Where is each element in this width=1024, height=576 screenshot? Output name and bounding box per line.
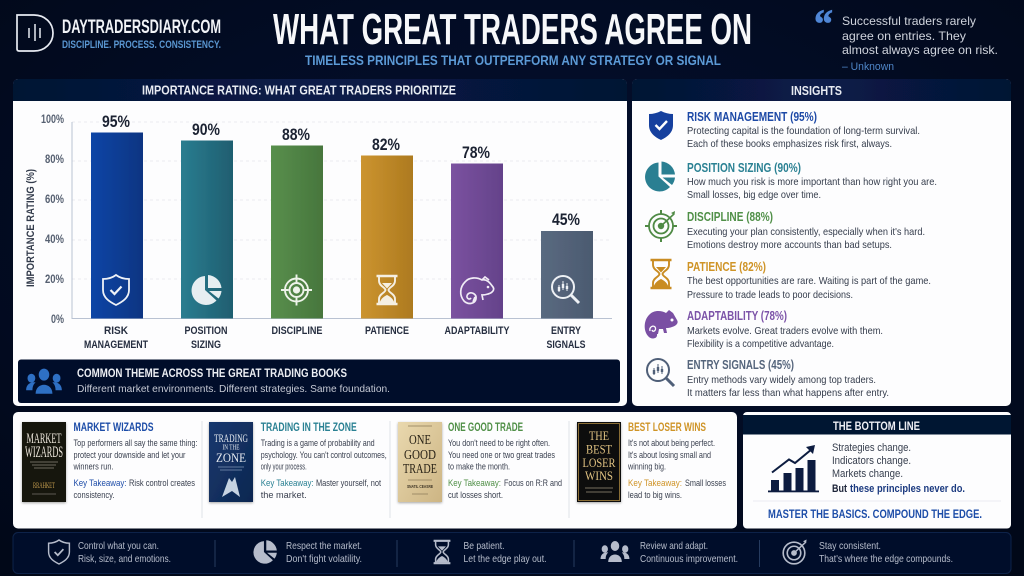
principle: control: Risk, size, and emotions. — [78, 553, 171, 565]
insight: entry signals: ENTRY SIGNALS (45%) — [687, 358, 794, 372]
bottom line text: Indicators change. — [832, 455, 911, 467]
bar: discipline: 88% — [282, 126, 310, 144]
book: best loser wins: BEST LOSER WINS — [628, 422, 706, 434]
principle: patience — [434, 540, 546, 565]
quote text: almost always agree on risk. — [842, 43, 998, 57]
y axis title: IMPORTANCE RATING (%) — [25, 169, 37, 287]
book: best loser wins: It's not about being perfect. — [628, 438, 715, 449]
principle: patience: Be patient. — [464, 540, 504, 552]
book cover: best loser wins: BEST — [586, 442, 612, 456]
y axis labels: 60% — [45, 194, 64, 206]
insight: adaptability — [645, 309, 883, 350]
bottom line text: these principles never do. — [850, 483, 965, 495]
book: trading in the zone — [209, 422, 387, 502]
bar: discipline — [271, 126, 323, 337]
insight: position sizing: Small losses, big edge over time. — [687, 189, 821, 201]
bar: entry signals: ENTRY — [551, 325, 582, 337]
bar: entry signals: SIGNALS — [546, 339, 586, 351]
book cover: best loser wins — [577, 422, 621, 502]
principle: consistency: Stay consistent. — [819, 540, 881, 552]
quote — [814, 1, 998, 73]
bar: entry signals: 45% — [552, 211, 580, 229]
title: WHAT GREAT TRADERS AGREE ON — [273, 5, 752, 54]
insight: discipline: Emotions destroy more accounts than bad setups. — [687, 239, 892, 251]
book cover: market wizards — [22, 422, 66, 502]
book cover: one good trade: TRADE — [403, 461, 437, 476]
bar: patience: 82% — [372, 136, 400, 154]
bar: risk management — [84, 113, 148, 351]
header logo — [17, 15, 221, 51]
book: market wizards: consistency. — [74, 490, 114, 501]
insight: discipline: DISCIPLINE (88%) — [687, 210, 773, 224]
book: best loser wins: It's about losing small and — [628, 450, 711, 461]
book: best loser wins: Key Takeaway: — [628, 478, 682, 489]
y axis labels: 40% — [45, 234, 64, 246]
panel: the bottom line — [743, 412, 1011, 528]
insight: entry signals: It matters far less than what happens after entry. — [687, 387, 889, 399]
common theme heading: COMMON THEME ACROSS THE GREAT TRADING BOOKS — [77, 368, 347, 380]
book: market wizards: Risk control creates — [129, 478, 195, 489]
principle: consistency: That's where the edge compounds. — [819, 553, 953, 565]
bar: position sizing: POSITION — [184, 325, 228, 337]
principle: control: Control what you can. — [78, 540, 159, 552]
book: trading in the zone: only your process. — [261, 462, 307, 472]
book cover: trading in the zone: TRADING — [214, 431, 248, 445]
book: trading in the zone: TRADING IN THE ZONE — [261, 422, 357, 434]
book: trading in the zone: Trading is a game of probability and — [261, 438, 375, 449]
bar: position sizing: 90% — [192, 121, 220, 139]
book cover: market wizards: RRAHKET — [33, 481, 55, 490]
principle: respect: Don't fight volatility. — [286, 553, 362, 565]
y axis labels: 80% — [45, 154, 64, 166]
book: best loser wins: Small losses — [685, 478, 726, 489]
insight: entry signals — [647, 358, 889, 399]
principle: review — [601, 540, 738, 565]
bar: discipline: DISCIPLINE — [272, 325, 322, 337]
principle: control — [49, 540, 171, 565]
principle: respect — [253, 540, 362, 565]
quote attribution: – Unknown — [842, 61, 894, 73]
book cover: best loser wins: LOSER — [582, 455, 616, 470]
book cover: trading in the zone: IN THE — [222, 442, 240, 452]
principle: patience: Let the edge play out. — [464, 553, 546, 565]
book: one good trade: You need one or two great trades — [448, 450, 555, 461]
insight: risk management: Each of these books emphasizes risk first, always. — [687, 138, 892, 150]
book: one good trade: Focus on R:R and — [504, 478, 562, 489]
bottom line text: But — [832, 483, 847, 495]
bar: adaptability: ADAPTABILITY — [444, 325, 510, 337]
insight: position sizing: POSITION SIZING (90%) — [687, 161, 801, 175]
book: best loser wins: winning big. — [627, 462, 666, 472]
panel: insights — [632, 79, 1011, 406]
book: trading in the zone: Key Takeaway: — [261, 478, 314, 489]
insight: risk management: RISK MANAGEMENT (95%) — [687, 110, 817, 124]
insight: patience: The best opportunities are rare. Waiting is part of the game. — [687, 275, 931, 287]
book: market wizards: Key Takeaway: — [74, 478, 126, 489]
book: market wizards: winners run. — [73, 462, 114, 472]
book: one good trade: Key Takeaway: — [448, 478, 501, 489]
book: one good trade: You don't need to be right often. — [448, 438, 550, 449]
insight: risk management: Protecting capital is the foundation of long-term survival. — [687, 125, 920, 137]
insight: patience: Pressure to trade leads to poor decisions. — [687, 289, 853, 301]
bar: entry signals — [541, 211, 593, 351]
common theme text: Different market environments. Different strategies. Same foundation. — [77, 383, 390, 395]
book: one good trade: cut losses short. — [448, 490, 503, 501]
insight: position sizing: How much you risk is more important than how right you are. — [687, 176, 937, 188]
book cover: market wizards: MARKET — [26, 431, 62, 447]
bottom line heading: THE BOTTOM LINE — [833, 421, 920, 433]
bar: position sizing: SIZING — [191, 339, 221, 351]
book: market wizards: MARKET WIZARDS — [74, 422, 154, 434]
bar chart — [25, 113, 612, 351]
panel: books — [13, 412, 737, 528]
book cover: one good trade: SNATIL CEASRE — [407, 484, 433, 489]
bottom line text: Strategies change. — [832, 442, 911, 454]
y axis labels: 100% — [41, 114, 64, 126]
book: market wizards: Top performers all say the same thing: — [74, 438, 198, 449]
book: one good trade: to make the month. — [448, 462, 510, 472]
book cover: best loser wins: THE — [589, 428, 609, 443]
book: best loser wins: lead to big wins. — [628, 490, 682, 501]
bar: adaptability — [444, 144, 510, 337]
book: market wizards: protect your downside and let your — [74, 450, 186, 461]
insight: patience — [650, 260, 931, 301]
book: one good trade — [398, 422, 562, 502]
bottom line text: Markets change. — [832, 468, 903, 480]
book: trading in the zone: Master yourself, not — [316, 478, 381, 489]
insight: risk management — [649, 110, 920, 150]
quote text: agree on entries. They — [842, 29, 966, 43]
insight: adaptability: Markets evolve. Great traders evolve with them. — [687, 325, 883, 337]
book: best loser wins — [577, 422, 726, 502]
book cover: trading in the zone — [209, 422, 253, 502]
insight: discipline — [645, 210, 925, 251]
chart heading: IMPORTANCE RATING: WHAT GREAT TRADERS PRIORITIZE — [142, 84, 456, 98]
bar: risk management: RISK — [104, 325, 128, 337]
callout: common theme — [18, 360, 620, 403]
book cover: one good trade: ONE — [409, 432, 431, 447]
subtitle: TIMELESS PRINCIPLES THAT OUTPERFORM ANY STRATEGY OR SIGNAL — [305, 52, 721, 68]
bar: patience — [361, 136, 413, 337]
insight: entry signals: Entry methods vary widely among top traders. — [687, 374, 876, 386]
icon: rising bar chart — [768, 445, 819, 492]
brand name: DAYTRADERSDIARY.COM — [62, 17, 221, 38]
book cover: one good trade: GOOD — [404, 447, 436, 462]
panel: footer principles — [13, 532, 1011, 574]
principle: review: Continuous improvement. — [640, 553, 738, 565]
insight: discipline: Executing your plan consistently, especially when it's hard. — [687, 226, 925, 238]
bar: position sizing — [181, 121, 233, 351]
y axis labels: 20% — [45, 274, 64, 286]
brand tagline: DISCIPLINE. PROCESS. CONSISTENCY. — [62, 39, 221, 51]
bar: patience: PATIENCE — [365, 325, 409, 337]
book cover: trading in the zone: ZONE — [216, 451, 246, 465]
book: market wizards — [22, 422, 198, 502]
insights heading: INSIGHTS — [791, 84, 842, 98]
panel: importance rating chart — [13, 79, 627, 406]
book: trading in the zone: psychology. You can't control outcomes, — [261, 450, 387, 461]
principle: review: Review and adapt. — [640, 540, 708, 552]
bar: risk management: 95% — [102, 113, 130, 131]
insight: adaptability: ADAPTABILITY (78%) — [687, 309, 787, 323]
book: one good trade: ONE GOOD TRADE — [448, 422, 523, 434]
principle: respect: Respect the market. — [286, 540, 362, 552]
bar: adaptability: 78% — [462, 144, 490, 162]
icon: people — [26, 369, 62, 394]
insight: patience: PATIENCE (82%) — [687, 260, 766, 274]
insight: adaptability: Flexibility is a competitive advantage. — [687, 338, 834, 350]
book: trading in the zone: the market. — [261, 490, 307, 501]
y axis labels: 0% — [51, 314, 64, 326]
bar: risk management: MANAGEMENT — [84, 339, 148, 351]
icon: logo mark — [17, 15, 53, 51]
book cover: best loser wins: WINS — [585, 468, 613, 483]
book cover: one good trade — [398, 422, 442, 502]
y axis labels — [41, 114, 64, 326]
icon: quotation mark: “ — [814, 1, 833, 46]
insight: position sizing — [645, 161, 937, 201]
principle: consistency — [783, 540, 953, 565]
book cover: market wizards: WIZARDS — [25, 444, 63, 461]
quote text: Successful traders rarely — [842, 14, 976, 28]
